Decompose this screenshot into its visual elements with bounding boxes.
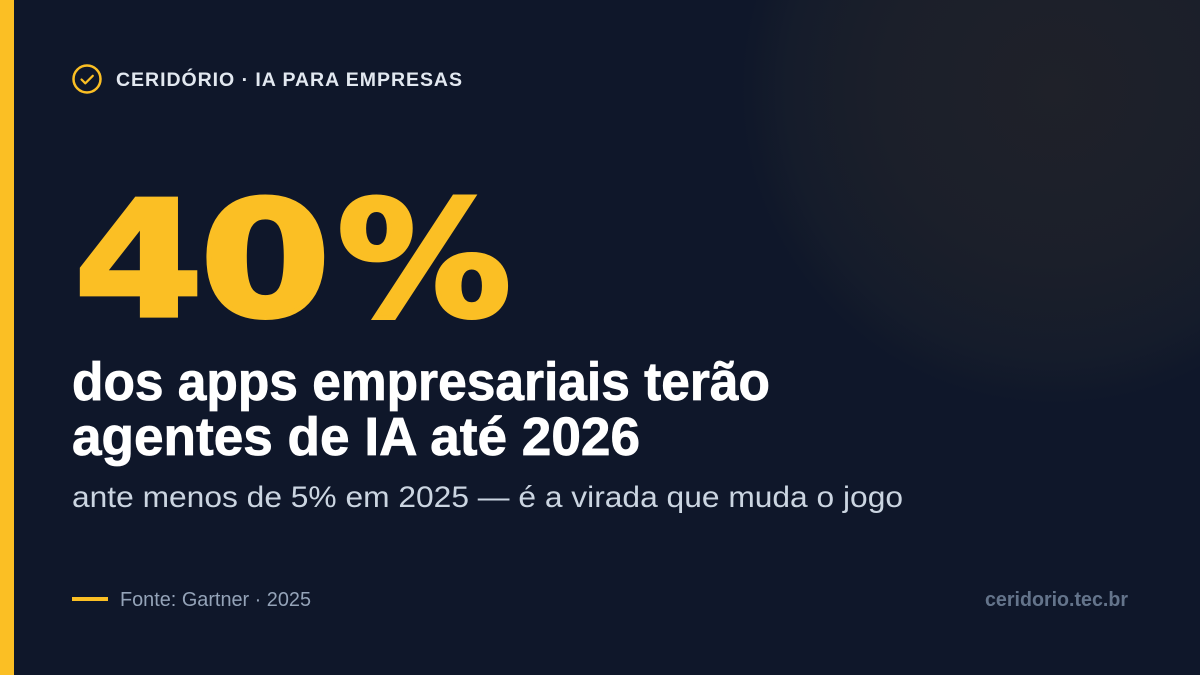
headline: agentes de IA até 2026 <box>72 407 640 467</box>
big number <box>74 167 511 354</box>
background glow <box>700 0 1200 440</box>
source dash <box>72 597 108 601</box>
source <box>72 589 311 611</box>
big number: 0 <box>200 168 331 354</box>
subheadline: ante menos de 5% em 2025 — é a virada que muda o jogo <box>72 481 903 514</box>
headline <box>72 352 770 467</box>
header <box>74 66 462 92</box>
source text: Fonte: Gartner · 2025 <box>120 589 311 611</box>
big number: % <box>337 168 511 354</box>
brand label: CERIDÓRIO · IA PARA EMPRESAS <box>116 67 462 91</box>
website: ceridorio.tec.br <box>985 589 1128 611</box>
big number: 4 <box>74 167 203 353</box>
headline: dos apps empresariais terão <box>72 352 770 412</box>
accent bar <box>0 0 14 675</box>
icon: check circle <box>74 66 100 92</box>
